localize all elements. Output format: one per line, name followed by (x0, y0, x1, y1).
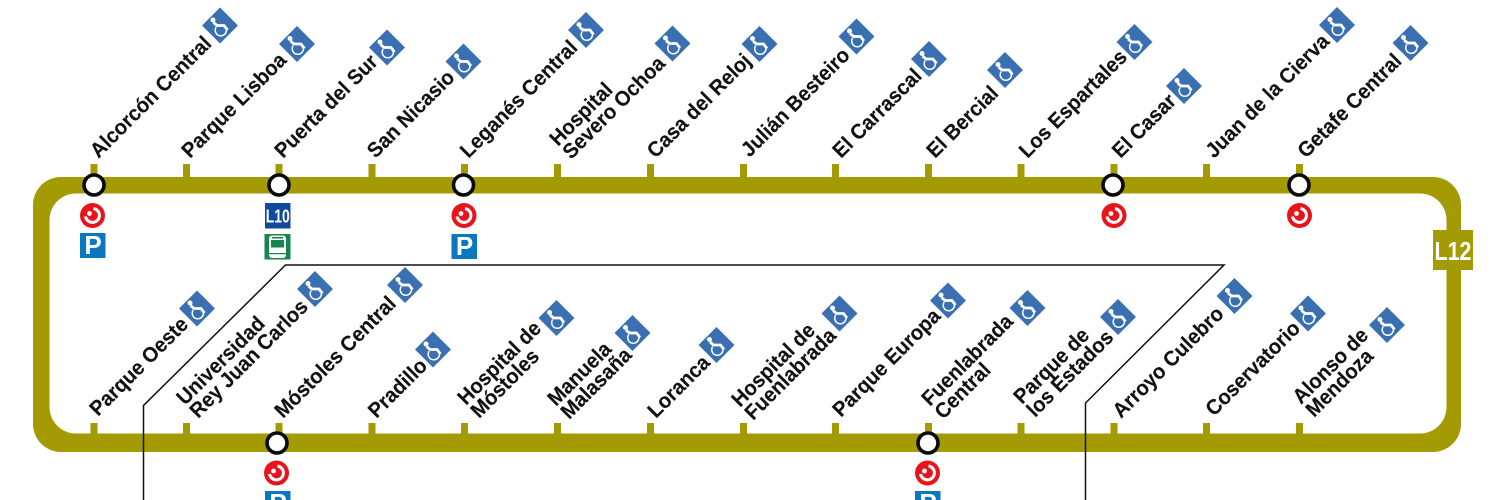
station labels: top row: Getafe Central (1293, 49, 1406, 163)
station labels: top row: El Casar (1107, 89, 1181, 163)
track loop (33, 177, 1461, 452)
station labels: top row: Puerta del Sur (270, 50, 383, 163)
line badge L12 (1433, 230, 1473, 270)
station labels: bottom row: los Estados (1022, 326, 1118, 422)
station labels: bottom row: Manuela (543, 337, 616, 411)
station labels: top row: Hospital (545, 78, 618, 151)
station labels: bottom row (85, 282, 1386, 425)
station ticks (90, 164, 1303, 435)
station labels: bottom row: Loranca (643, 350, 715, 423)
station labels: top row: Los Espartales (1014, 45, 1132, 163)
station labels: bottom row: Hospital de (727, 319, 820, 412)
station labels: bottom row: Arroyo Culebro (1108, 302, 1229, 423)
station labels: bottom row: Coservatorio (1201, 317, 1305, 421)
station labels: top row: Alcorcón Central (85, 32, 216, 163)
icon: bus (264, 234, 290, 260)
station labels: bottom row: Fuenlabrada (917, 310, 1018, 411)
station labels: bottom row: Hospital de (453, 317, 546, 410)
station labels: top row: Julián Besteiro (736, 43, 855, 162)
station labels: top row: El Carrascal (828, 64, 927, 163)
station labels: top row: Severo Ochoa (558, 51, 670, 164)
interchange circles (84, 175, 1309, 453)
station labels: bottom row: Móstoles (466, 345, 544, 423)
station labels: bottom row: Móstoles Central (270, 292, 401, 423)
station labels: bottom row: Universidad (172, 312, 270, 410)
station labels: bottom row: Alonso de (1288, 323, 1373, 409)
station labels: top row: Juan de la Cierva (1201, 29, 1335, 163)
icons: Cercanías (80, 203, 1312, 486)
station labels: bottom row: Parque Europa (828, 304, 946, 422)
station labels: bottom row: Central (930, 358, 996, 424)
station labels: bottom row: Rey Juan Carlos (185, 295, 313, 423)
icon: L10 connection: L10 (266, 206, 290, 226)
station labels: bottom row: Mendoza (1301, 344, 1379, 422)
station labels: top row: Parque Lisboa (177, 48, 292, 163)
line badge L12: L12 (1434, 236, 1472, 266)
station labels: bottom row: Fuenlabrada (740, 323, 841, 425)
icons: parking (80, 230, 940, 500)
station labels: bottom row: Parque Oeste (85, 313, 193, 421)
station labels: top row: El Bercial (922, 81, 1003, 163)
station labels: top row: Leganés Central (455, 36, 582, 163)
station labels: bottom row: Pradillo (363, 354, 432, 423)
icon: L10 connection (265, 203, 290, 228)
station labels: bottom row: Parque de (1009, 323, 1094, 409)
station labels: bottom row: Malasaña (556, 343, 637, 424)
station labels: top row (85, 29, 1406, 164)
station labels: top row: Casa del Reloj (642, 49, 756, 163)
station labels: top row: San Nicasio (362, 66, 459, 163)
thin black boundary line (144, 265, 1224, 500)
accessibility icons (179, 7, 1428, 368)
